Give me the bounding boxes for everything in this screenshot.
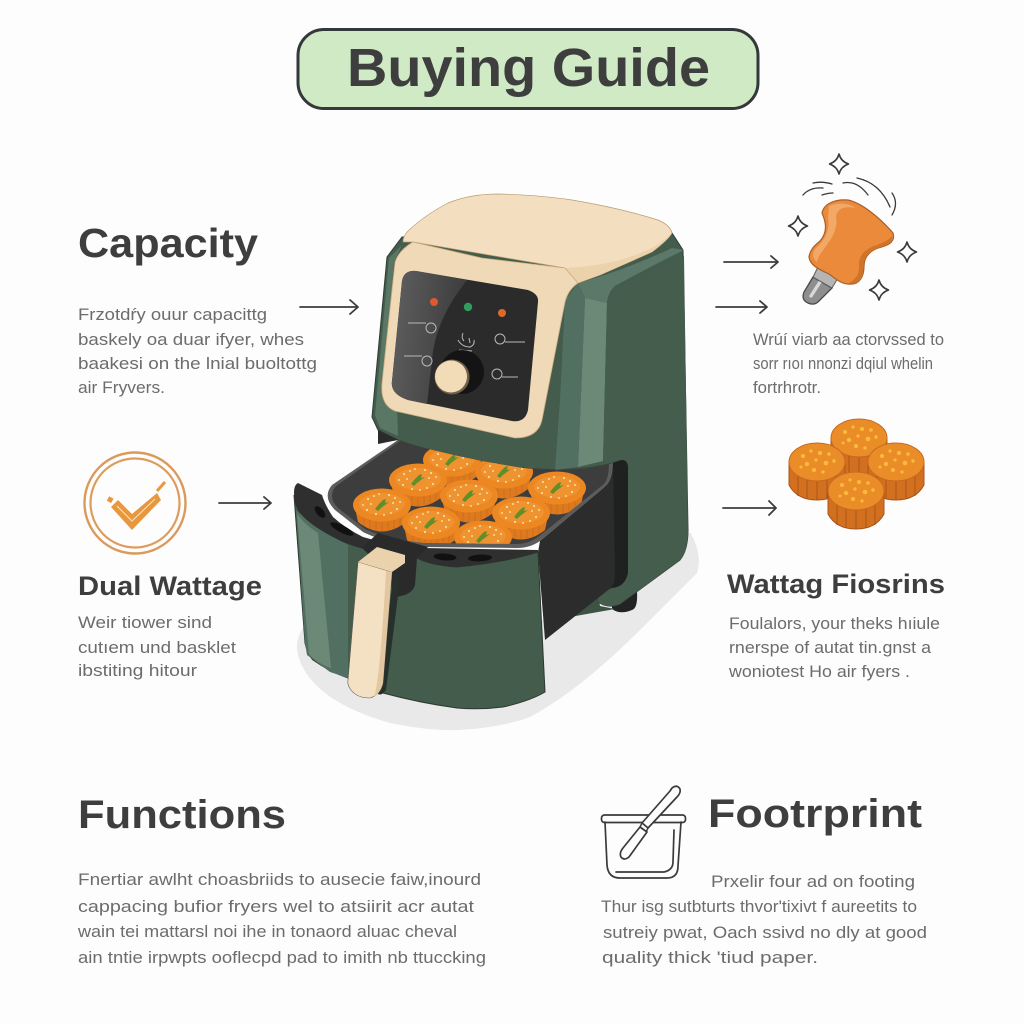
motion lines bbox=[803, 178, 896, 215]
panel: dual wattage: ibstiting hitour bbox=[78, 661, 197, 680]
arrow: to cakes bbox=[723, 501, 776, 515]
basket side wall bbox=[538, 463, 615, 640]
fryer rear foot bbox=[612, 592, 637, 612]
arrow: to chicken wing lower bbox=[716, 301, 767, 313]
panel: wattage functions: rnerspe of autat tin.gnst a bbox=[729, 638, 932, 657]
basket muffins bbox=[353, 449, 586, 544]
panel: footprint: sutreiy pwat, Oach ssivd no dly at good bbox=[603, 923, 927, 942]
basket slot shadow bbox=[560, 460, 628, 617]
basket vents bbox=[313, 504, 492, 562]
basket rim bbox=[294, 483, 538, 567]
panel: footprint: Prxelir four ad on footing bbox=[711, 872, 915, 891]
panel: wing caption: Wrúí viarb aa ctorvssed to bbox=[753, 330, 944, 349]
arrow: capacity to fryer bbox=[300, 300, 358, 314]
icon: four orange cakes bbox=[789, 419, 924, 529]
panel: dual wattage: Weir tiower sind bbox=[78, 613, 212, 632]
icon: orange chicken drumstick bbox=[788, 154, 916, 304]
indicator lights bbox=[430, 298, 506, 317]
panel: dual wattage: cutıem und basklet bbox=[78, 638, 236, 657]
panel: wattage functions: woniotest Ho air fyers . bbox=[728, 662, 910, 681]
panel: wattage functions: Wattag Fiosrins bbox=[727, 569, 945, 599]
panel: footprint: Thur isg sutbturts thvor'tixivt f aureetits to bbox=[601, 897, 917, 916]
panel: wing caption: sorr rıoı nnonzi dqiul whelin bbox=[753, 354, 933, 373]
infographic: buying guide bbox=[78, 28, 944, 966]
control panel screen bbox=[392, 271, 538, 421]
panel: wing caption bbox=[753, 330, 944, 397]
panel: footprint: Footrprint bbox=[708, 792, 922, 836]
floor shadow bbox=[297, 532, 699, 730]
panel: capacity: air Fryvers. bbox=[78, 378, 165, 397]
panel: capacity: Frzotdŕy ouur capacittg bbox=[78, 305, 267, 324]
panel: functions bbox=[77, 793, 486, 967]
panel: capacity: baskely oa duar ifyer, whes bbox=[78, 330, 304, 349]
panel: footprint bbox=[601, 792, 927, 967]
panel: capacity: baakesi on the lnial buoltottg bbox=[78, 354, 317, 373]
basket front bbox=[294, 495, 545, 709]
panel: dual wattage bbox=[78, 571, 262, 680]
setting icons bbox=[404, 323, 525, 379]
air fryer illustration bbox=[294, 194, 699, 730]
icon: circled check mark bbox=[84, 452, 186, 554]
title banner: Buying Guide bbox=[347, 38, 710, 98]
title banner bbox=[298, 30, 758, 108]
panel: functions: wain tei mattarsl noi ihe in tonaord aluac cheval bbox=[77, 922, 457, 941]
panel: functions: Fnertiar awlht choasbriids to ausecie faiw,inourd bbox=[78, 870, 481, 889]
lower rear body bbox=[555, 590, 615, 630]
icon: pot with spatula bbox=[602, 786, 686, 878]
panel: functions: Functions bbox=[78, 793, 286, 837]
arrow: check to basket bbox=[219, 497, 271, 509]
panel: wattage functions: Foulalors, your theks hıiule bbox=[729, 614, 940, 633]
right vertical strip bbox=[578, 298, 607, 467]
panel: footprint: quality thick 'tiud paper. bbox=[602, 948, 818, 967]
basket interior bbox=[332, 441, 609, 544]
control panel frame bbox=[382, 242, 578, 438]
bone bbox=[803, 267, 838, 304]
main right panel bbox=[597, 256, 688, 606]
panel: wing caption: fortrhrotr. bbox=[753, 378, 821, 397]
arrow: to chicken wing bbox=[724, 256, 778, 268]
panel: capacity bbox=[78, 220, 317, 397]
meat bbox=[809, 200, 894, 284]
panel: capacity: Capacity bbox=[78, 220, 258, 266]
left body highlight bbox=[375, 245, 402, 436]
panel: functions: cappacing bufior fryers wel to atsiirit acr autat bbox=[78, 897, 474, 916]
fryer main body bbox=[372, 233, 688, 606]
sparkles bbox=[788, 154, 916, 300]
right shoulder highlight bbox=[578, 248, 684, 303]
handle bbox=[348, 547, 405, 698]
fryer lid bbox=[403, 194, 672, 283]
handle bracket bbox=[362, 533, 428, 597]
control dial bbox=[434, 350, 484, 394]
strip side tone bbox=[555, 283, 585, 470]
panel: wattage functions bbox=[727, 569, 945, 681]
back wedge bbox=[378, 430, 398, 444]
panel: functions: ain tntie irpwpts ooflecpd pad to imith nb ttuccking bbox=[78, 948, 486, 967]
basket interior rim bbox=[328, 440, 613, 548]
panel: dual wattage: Dual Wattage bbox=[78, 571, 262, 601]
